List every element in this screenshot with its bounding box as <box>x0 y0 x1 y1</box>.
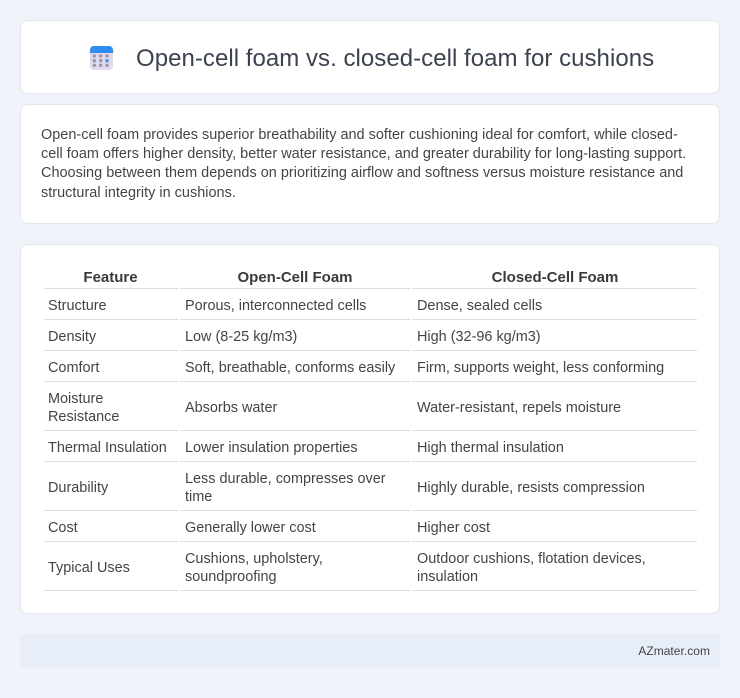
table header row <box>83 269 618 286</box>
row: typical uses: Outdoor cushions, flotation devices, <box>417 551 646 567</box>
row: thermal insulation: High thermal insulation <box>417 440 564 456</box>
row: moisture resistance: Water-resistant, repels moisture <box>417 400 621 416</box>
row: durability: Highly durable, resists compression <box>417 480 645 496</box>
row: moisture resistance: Moisture <box>48 391 103 407</box>
row: cost: Cost <box>48 520 78 536</box>
summary text: cell foam offers higher density, better water resistance, and greater durability for long-lasting support. <box>41 146 686 162</box>
row: thermal insulation: Lower insulation properties <box>185 440 358 456</box>
row: structure: Structure <box>48 298 107 314</box>
row: typical uses: Typical Uses <box>48 560 130 576</box>
row: density <box>48 329 541 345</box>
row: durability: time <box>185 489 212 505</box>
footer credit: AZmater.com <box>638 644 710 658</box>
panel: comparison table <box>20 244 720 614</box>
footer bar <box>20 634 720 668</box>
row: structure <box>48 298 542 314</box>
panel: title card <box>20 20 720 94</box>
row: cost <box>48 520 490 536</box>
row: durability: Durability <box>48 480 108 496</box>
icon: calendar <box>90 46 113 70</box>
row: typical uses: insulation <box>417 569 478 585</box>
summary text <box>41 126 686 201</box>
row: comfort: Firm, supports weight, less conforming <box>417 360 664 376</box>
summary text: Open-cell foam provides superior breathability and softer cushioning ideal for comfort, while closed- <box>41 126 678 142</box>
row: moisture resistance: Absorbs water <box>185 400 277 416</box>
title: Open-cell foam vs. closed-cell foam for cushions <box>136 45 654 72</box>
table header row: Closed-Cell Foam <box>492 269 618 286</box>
row: comfort: Soft, breathable, conforms easily <box>185 360 395 376</box>
table header row: Feature <box>83 269 138 286</box>
table header row: Open-Cell Foam <box>237 269 352 286</box>
row: durability: Less durable, compresses over <box>185 471 386 487</box>
row: moisture resistance: Resistance <box>48 409 119 425</box>
row: cost: Generally lower cost <box>185 520 316 536</box>
row: density: Low (8-25 kg/m3) <box>185 329 297 345</box>
row: cost: Higher cost <box>417 520 490 536</box>
row: thermal insulation <box>48 440 564 456</box>
row: structure: Dense, sealed cells <box>417 298 542 314</box>
row: typical uses: Cushions, upholstery, <box>185 551 323 567</box>
row: thermal insulation: Thermal Insulation <box>48 440 167 456</box>
row: moisture resistance <box>48 391 621 425</box>
row: structure: Porous, interconnected cells <box>185 298 366 314</box>
row: comfort: Comfort <box>48 360 99 376</box>
summary text: structural integrity in cushions. <box>41 185 236 201</box>
panel: summary <box>20 104 720 224</box>
row: typical uses: soundproofing <box>185 569 277 585</box>
row: typical uses <box>48 551 646 585</box>
summary text: Choosing between them depends on prioritizing airflow and softness versus moisture resistance and <box>41 165 683 181</box>
row: comfort <box>48 360 664 376</box>
row: durability <box>48 471 645 505</box>
row: density: Density <box>48 329 96 345</box>
row: density: High (32-96 kg/m3) <box>417 329 541 345</box>
